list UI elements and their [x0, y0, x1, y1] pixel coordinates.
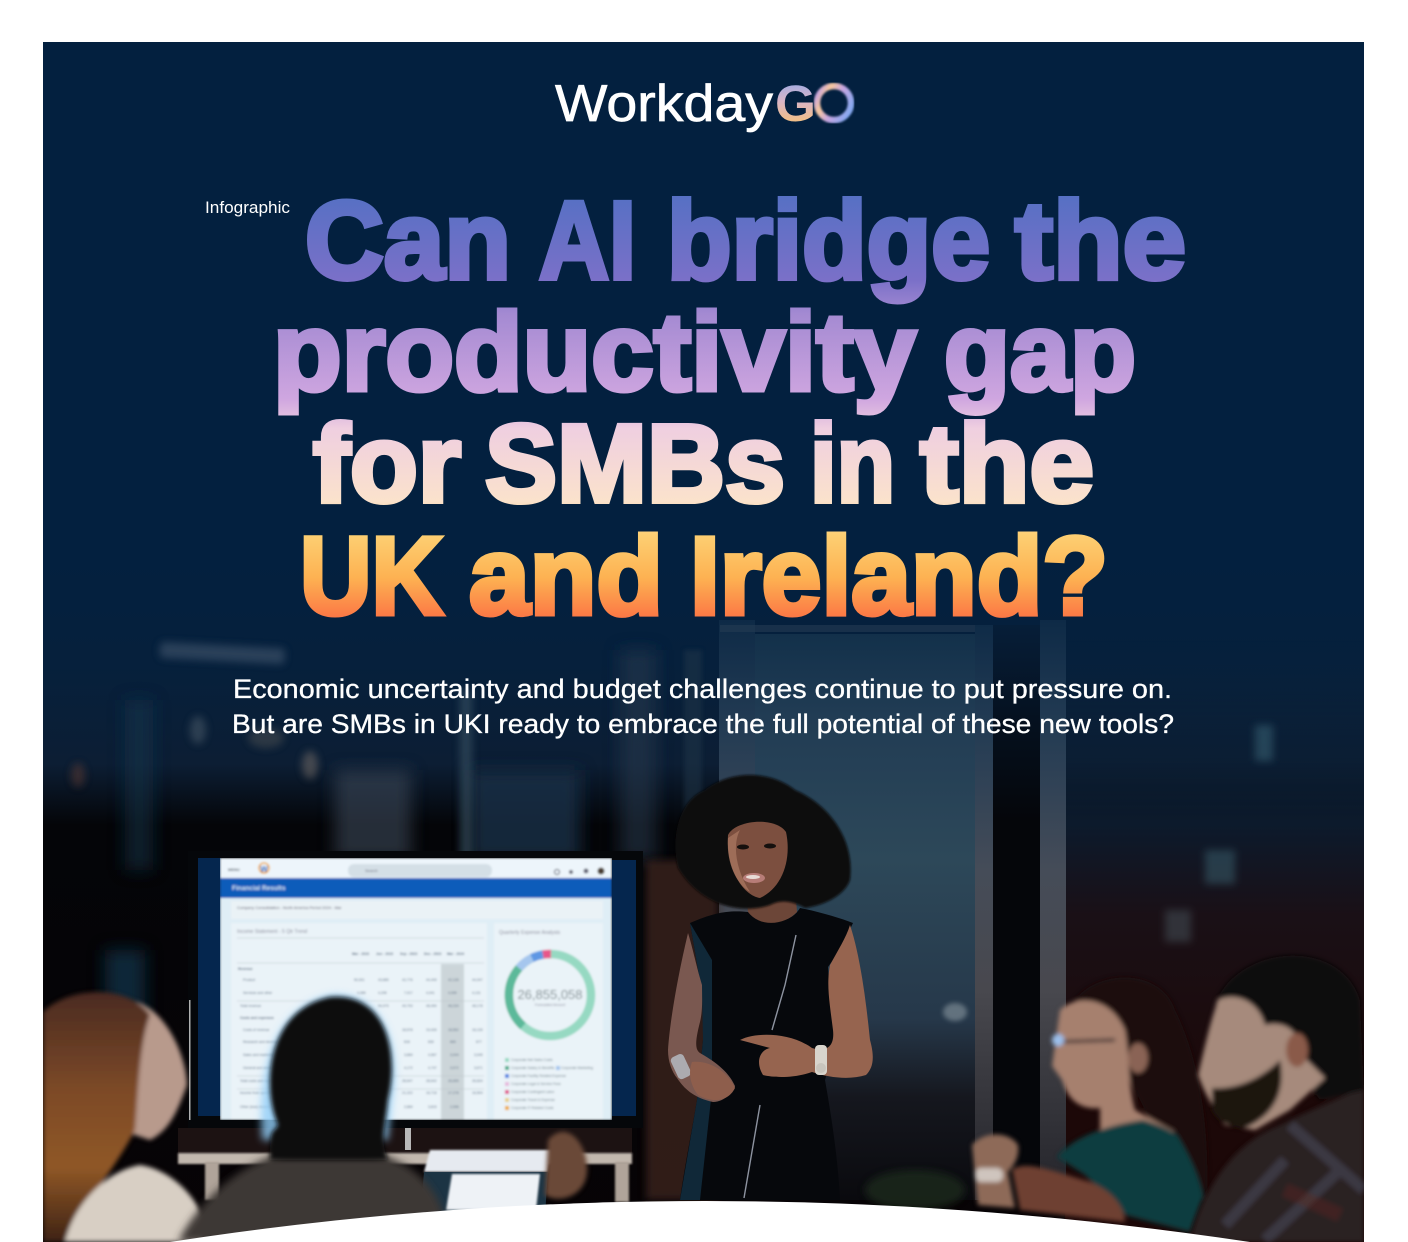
table rows: 21,222 — [402, 1091, 413, 1095]
presenter right arm — [740, 925, 873, 1078]
table rows: 16,718 — [426, 1091, 437, 1095]
title: and — [469, 515, 663, 638]
monitor screen: financial results dashboard: Forecasted Amount — [535, 1003, 565, 1007]
table rows: Revenue — [238, 967, 253, 971]
title: in — [810, 402, 895, 526]
blurred audience: bearded man — [1190, 955, 1364, 1242]
title: Can — [305, 180, 511, 302]
title: UK — [300, 515, 443, 638]
background photo: office at night — [43, 567, 1365, 1242]
title: the — [1015, 180, 1186, 302]
table rows — [238, 952, 483, 1109]
table rows: 18,552 — [448, 1028, 459, 1032]
table rows: 28,647 — [402, 1079, 413, 1083]
monitor screen: financial results dashboard: Corporate Legal & Service Fees — [511, 1082, 561, 1086]
table rows: 7,017 — [404, 991, 413, 995]
title — [273, 180, 1186, 638]
table rows: 4,131 — [472, 991, 481, 995]
table rows: Mar - 2024 — [447, 952, 464, 956]
monitor screen: financial results dashboard: Corporate Marketing — [561, 1066, 593, 1070]
table rows: Costs and expenses — [240, 1016, 274, 1020]
monitor screen: financial results dashboard — [220, 858, 612, 1120]
title: Ireland? — [690, 515, 1108, 638]
table rows: Research and development — [243, 1040, 286, 1044]
table rows: 830 — [428, 1040, 434, 1044]
blurred audience: person centre with halo — [178, 995, 446, 1242]
table rows: Income from operations — [240, 1091, 277, 1095]
monitor screen: financial results dashboard: Corporate Travel & Expense — [511, 1098, 555, 1102]
monitor screen: financial results dashboard: Corporate IT Related Costs — [511, 1106, 554, 1110]
monitor screen: financial results dashboard: W — [260, 865, 268, 874]
table rows: Total revenue — [240, 1004, 261, 1008]
logo: Workday GO: Workday — [555, 75, 773, 133]
presenter dress — [680, 908, 853, 1200]
table rows: Sales and marketing — [243, 1053, 275, 1057]
monitor screen: financial results dashboard: Corporate Facility Related Expense — [511, 1074, 566, 1078]
logo: Workday GO: G — [775, 75, 816, 132]
table rows: 3,945 — [474, 1053, 483, 1057]
table rows: Mar - 2023 — [352, 952, 369, 956]
table rows: 860 — [450, 1040, 456, 1044]
blurred audience: woman in green — [972, 978, 1207, 1232]
subtitle: Economic uncertainty and budget challenges continue to put pressure on. — [233, 674, 1172, 704]
table rows: 44,449 — [426, 978, 437, 982]
table rows: 3,815 — [428, 1105, 437, 1109]
table rows: 877 — [476, 1040, 482, 1044]
table rows: General and admin — [243, 1066, 273, 1070]
table rows: Services and other — [243, 991, 273, 995]
title: SMBs — [485, 402, 785, 526]
table rows: 43,685 — [378, 978, 389, 982]
monitor screen: financial results dashboard: Corporate Net Sales Costs — [511, 1058, 553, 1062]
table rows: 4,747 — [428, 1066, 437, 1070]
table rows: 16,139 — [472, 1028, 483, 1032]
right background — [1065, 784, 1364, 1242]
table rows: Dec - 2023 — [424, 952, 441, 956]
table rows: 28,642 — [426, 1079, 437, 1083]
monitor screen: financial results dashboard: Search — [365, 868, 378, 873]
donut chart — [509, 954, 591, 1036]
table rows: Jun - 2023 — [376, 952, 393, 956]
table rows: 48,490 — [426, 1004, 437, 1008]
monitor — [188, 851, 643, 1128]
table rows: 19,426 — [426, 1028, 437, 1032]
table rows: 4,089 — [357, 991, 366, 995]
monitor screen: financial results dashboard: 26,855,058 — [517, 987, 583, 1002]
table rows: 44,047 — [472, 978, 483, 982]
blurred audience: woman at left — [43, 992, 205, 1242]
table rows: 3,972 — [450, 1066, 459, 1070]
table rows: 4,041 — [426, 991, 435, 995]
table rows: 46,234 — [448, 1004, 459, 1008]
table rows: 26,834 — [472, 1079, 483, 1083]
table rows: 4,099 — [448, 991, 457, 995]
table rows: 18,578 — [402, 1028, 413, 1032]
logo: Workday GO — [555, 75, 851, 133]
monitor screen: financial results dashboard: Corporate Contingent Labor — [511, 1090, 555, 1094]
table rows: Other (loss) income — [240, 1105, 271, 1109]
table rows: Total costs and expenses — [240, 1079, 280, 1083]
presenter — [668, 775, 873, 1200]
table rows: Costs of revenue — [243, 1028, 270, 1032]
title: productivity — [273, 291, 916, 414]
white curved bottom — [170, 1201, 1250, 1242]
table rows: 54,975 — [378, 1004, 389, 1008]
table rows: 42,776 — [402, 978, 413, 982]
table rows: Product — [243, 978, 255, 982]
table rows: 16,504 — [472, 1091, 483, 1095]
title: for — [313, 402, 461, 526]
presenter hair, neck, face — [748, 900, 797, 923]
monitor screen: financial results dashboard: MENU — [228, 867, 240, 872]
title: the — [920, 402, 1094, 526]
table rows: 2,884 — [404, 1105, 413, 1109]
monitor screen: financial results dashboard: Company Consolidation - North America Period 2024 - Mar — [237, 905, 342, 910]
glass door and frame — [719, 620, 755, 914]
table rows: 3,884 — [404, 1053, 413, 1057]
label: Infographic: Infographic — [205, 198, 290, 217]
title: AI — [539, 180, 636, 302]
table rows: 4,172 — [404, 1066, 413, 1070]
table rows: 26,655 — [448, 1079, 459, 1083]
table rows: 48,178 — [472, 1004, 483, 1008]
table rows: 3,944 — [450, 1053, 459, 1057]
table rows: 42,135 — [448, 978, 459, 982]
title: bridge — [667, 180, 990, 302]
table rows: 818 — [404, 1040, 410, 1044]
monitor screen: financial results dashboard: Financial Results — [232, 885, 286, 892]
table rows: 4,295 — [378, 991, 387, 995]
title: gap — [944, 291, 1136, 414]
monitor screen: financial results dashboard: Income Statement - 5 Qtr Trend — [237, 929, 308, 935]
subtitle — [232, 674, 1174, 739]
monitor screen: financial results dashboard: Quarterly Expense Analysis — [499, 930, 561, 936]
table rows: 49,793 — [402, 1004, 413, 1008]
table rows: 2,996 — [450, 1105, 459, 1109]
presenter left arm — [668, 933, 735, 1102]
table rows: Sep - 2023 — [400, 952, 417, 956]
table rows: 4,567 — [428, 1053, 437, 1057]
monitor screen: financial results dashboard: Corporate Salary & Benefits — [511, 1066, 555, 1070]
plant — [865, 1170, 965, 1210]
table rows: 17,278 — [448, 1091, 459, 1095]
blurred office lights left — [98, 650, 662, 1008]
table rows: 50,931 — [354, 978, 365, 982]
subtitle: But are SMBs in UKI ready to embrace the full potential of these new tools? — [232, 709, 1174, 739]
desk and laptop — [178, 1128, 632, 1215]
table rows: 3,671 — [474, 1066, 483, 1070]
